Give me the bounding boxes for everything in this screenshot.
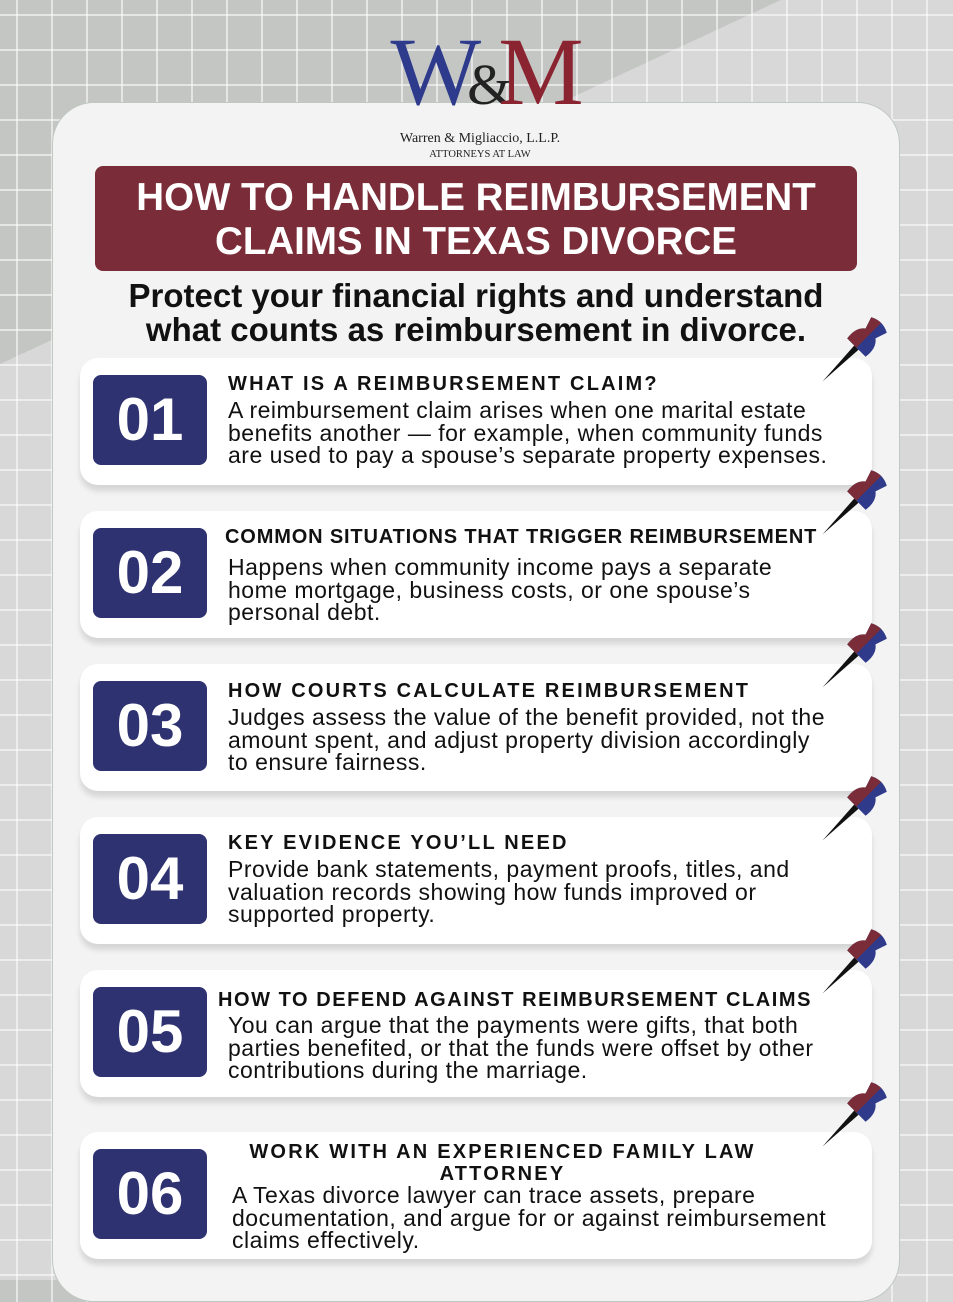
title banner: HOW TO HANDLE REIMBURSEMENT bbox=[136, 176, 816, 219]
card 05: contributions during the marriage. bbox=[228, 1057, 588, 1083]
card 03: HOW COURTS CALCULATE REIMBURSEMENT bbox=[228, 680, 750, 702]
card 02: home mortgage, business costs, or one spouse’s bbox=[228, 576, 750, 602]
logo: Warren & Migliaccio, L.L.P. bbox=[400, 131, 560, 146]
card 01: 01 bbox=[117, 386, 183, 453]
card 04: Provide bank statements, payment proofs, titles, and bbox=[228, 856, 790, 882]
card 04 bbox=[80, 817, 872, 944]
card 02: COMMON SITUATIONS THAT TRIGGER REIMBURSEMENT bbox=[225, 526, 817, 548]
card 06 bbox=[80, 1132, 872, 1259]
card 01: WHAT IS A REIMBURSEMENT CLAIM? bbox=[228, 373, 659, 395]
subtitle: what counts as reimbursement in divorce. bbox=[146, 311, 806, 348]
title banner bbox=[95, 166, 857, 271]
card 04: KEY EVIDENCE YOU’LL NEED bbox=[228, 832, 569, 854]
card 03 bbox=[80, 664, 872, 791]
card 05: You can argue that the payments were gifts, that both bbox=[228, 1012, 798, 1038]
card 04: supported property. bbox=[228, 901, 435, 927]
card 06: 06 bbox=[117, 1160, 183, 1227]
subtitle bbox=[129, 277, 823, 348]
icon: pin 5 bbox=[822, 929, 887, 994]
title banner: CLAIMS IN TEXAS DIVORCE bbox=[215, 220, 737, 263]
card 02 bbox=[80, 511, 872, 638]
icon: pin 1 bbox=[822, 317, 887, 382]
card 01 bbox=[80, 358, 872, 485]
card 04: valuation records showing how funds improved or bbox=[228, 878, 756, 904]
card 03: amount spent, and adjust property division accordingly bbox=[228, 726, 810, 752]
text: ATTORNEYS AT LAW bbox=[429, 149, 531, 160]
icon: pin 2 bbox=[822, 470, 887, 534]
card 05 bbox=[80, 970, 872, 1097]
card 05: HOW TO DEFEND AGAINST REIMBURSEMENT CLAIMS bbox=[218, 989, 812, 1011]
card 06: A Texas divorce lawyer can trace assets, prepare bbox=[232, 1182, 755, 1208]
card 05: 05 bbox=[117, 998, 183, 1065]
card 05: parties benefited, or that the funds were offset by other bbox=[228, 1034, 814, 1060]
card 06: claims effectively. bbox=[232, 1227, 420, 1253]
card 02: personal debt. bbox=[228, 599, 381, 625]
card 02: Happens when community income pays a separate bbox=[228, 554, 772, 580]
icon: pin 6 bbox=[822, 1082, 887, 1146]
card 06: WORK WITH AN EXPERIENCED FAMILY LAW ATTORNEY bbox=[249, 1141, 756, 1185]
card 03: 03 bbox=[117, 692, 183, 759]
card 01: are used to pay a spouse’s separate property expenses. bbox=[228, 442, 827, 468]
card 04: 04 bbox=[117, 845, 183, 912]
logo: W&M bbox=[390, 18, 570, 125]
card 03: Judges assess the value of the benefit provided, not the bbox=[228, 704, 825, 730]
card 03: to ensure fairness. bbox=[228, 749, 427, 775]
icon: pin 4 bbox=[822, 776, 887, 840]
card 01: A reimbursement claim arises when one marital estate bbox=[228, 397, 806, 423]
card 01: benefits another — for example, when community funds bbox=[228, 420, 823, 446]
card 02: 02 bbox=[117, 539, 183, 606]
subtitle: Protect your financial rights and understand bbox=[129, 277, 823, 314]
card 06: documentation, and argue for or against reimbursement bbox=[232, 1204, 826, 1230]
icon: pin 3 bbox=[822, 623, 887, 688]
